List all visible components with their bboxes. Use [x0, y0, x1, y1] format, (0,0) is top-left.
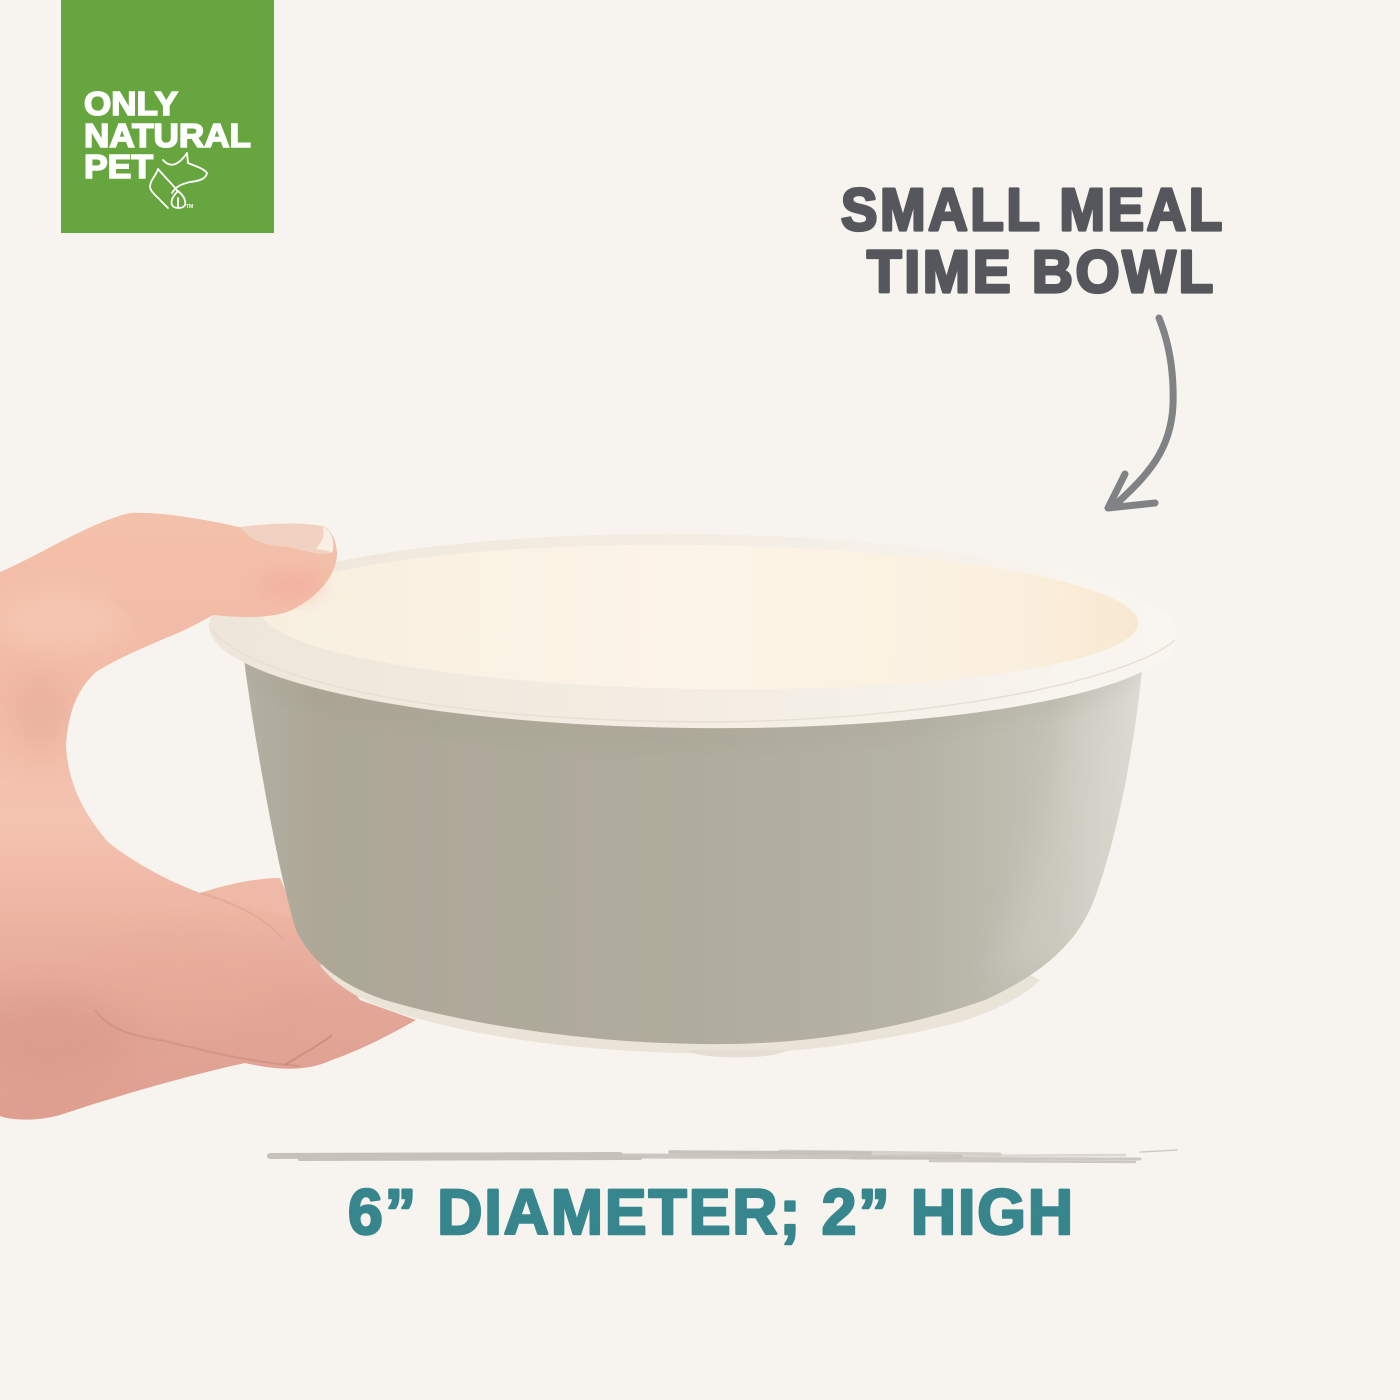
photo: bowl — [208, 529, 1178, 1058]
dimensions caption: 6” DIAMETER; 2” HIGH — [348, 1176, 1075, 1248]
bowl right highlight — [1018, 863, 1058, 958]
bowl foot — [686, 1050, 787, 1058]
icon: dog, cat and leaf — [150, 153, 207, 208]
bowl rim — [208, 529, 1178, 733]
bowl rim underside line — [212, 630, 1175, 722]
nail tip — [316, 527, 333, 553]
logo: Only Natural Pet: TM — [186, 204, 193, 210]
photo: hand holding the bowl — [0, 513, 416, 1120]
photo: finger and nail over the rim — [110, 513, 337, 640]
logo: Only Natural Pet: NATURAL — [84, 117, 251, 154]
hand shading — [26, 700, 55, 740]
shadow under rim — [223, 543, 1163, 737]
arrow: pointing to bowl — [1108, 318, 1173, 508]
fingertip blush — [258, 569, 322, 601]
heading: product name: TIME BOWL — [867, 239, 1216, 305]
logo: Only Natural Pet: PET — [84, 148, 153, 185]
fingernail — [240, 523, 334, 554]
heading: product name — [841, 177, 1225, 305]
bowl base lip — [320, 950, 1040, 1054]
bowl interior — [261, 539, 1139, 695]
logo: Only Natural Pet — [61, 0, 274, 233]
logo: Only Natural Pet: ONLY — [84, 85, 178, 122]
brush stroke divider — [270, 1150, 1177, 1162]
heading: product name: SMALL MEAL — [841, 177, 1225, 243]
bowl outer body — [244, 660, 1142, 1044]
